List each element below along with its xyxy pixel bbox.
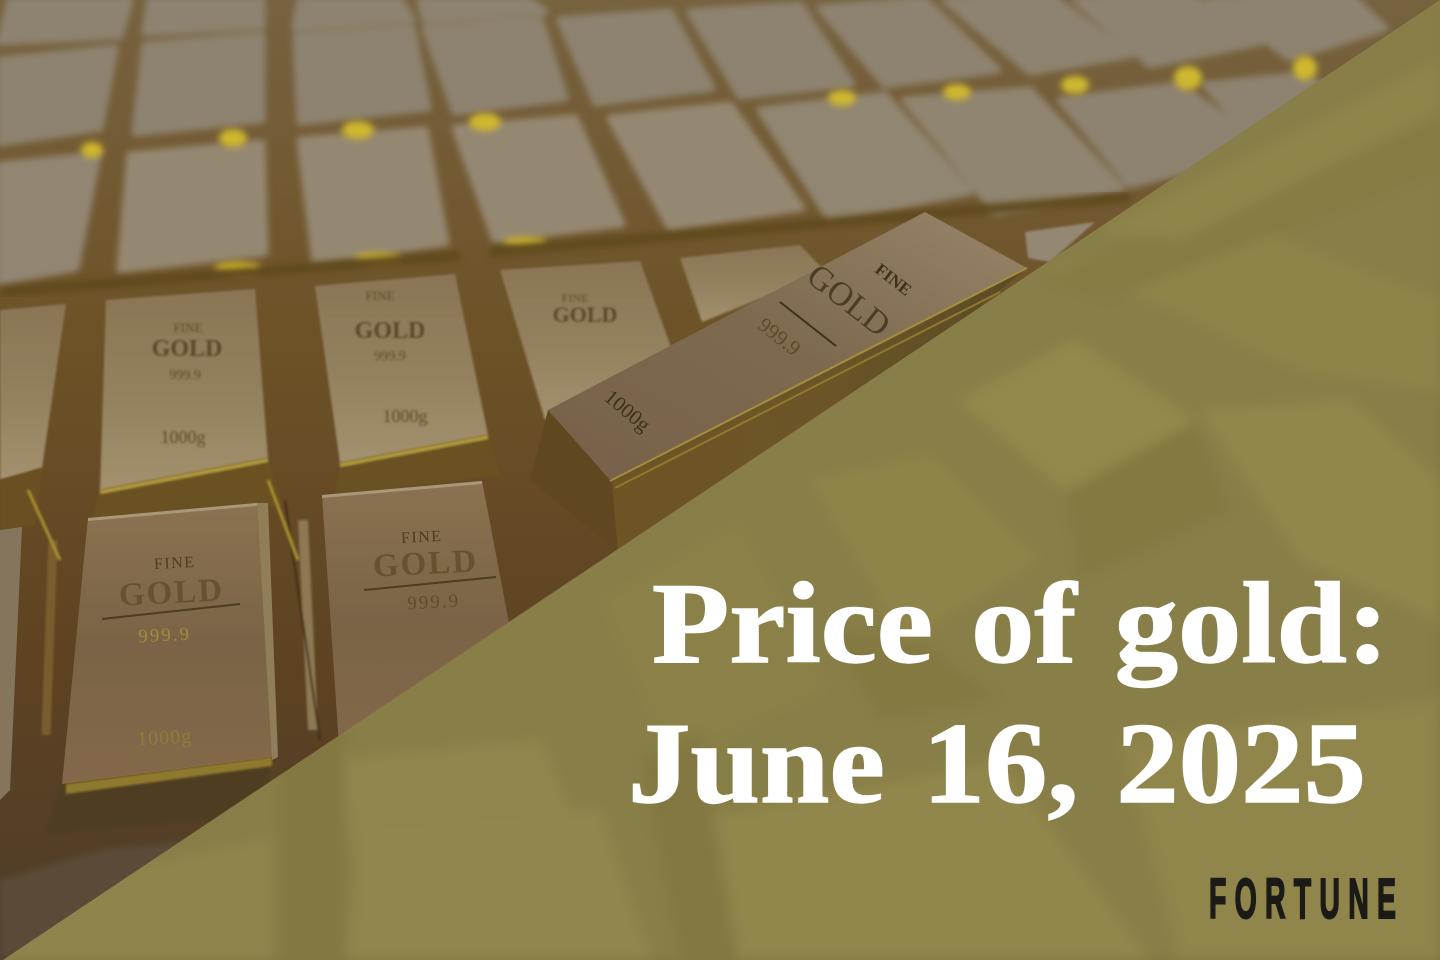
- front bar engraved labels: 999.9: [407, 591, 461, 614]
- shaded row edges: [0, 197, 1130, 292]
- middle row engraved labels: 999.9: [169, 368, 201, 383]
- middle row engraved labels: FINE: [562, 291, 588, 305]
- middle row engraved labels: 1000g: [160, 427, 206, 447]
- front bar engraved labels: FINE: [401, 528, 443, 547]
- middle row engraved labels: FINE: [174, 320, 203, 335]
- front bar engraved labels: GOLD: [118, 572, 225, 614]
- front bar engraved labels: [102, 528, 496, 750]
- featured bar engraving: FINE: [872, 260, 915, 300]
- middle row engraved labels: [152, 288, 617, 447]
- connector rods between front bars: [28, 480, 320, 740]
- front bar engraved labels: FINE: [154, 554, 196, 573]
- front bar engraved labels: 1000g: [137, 726, 193, 750]
- featured bar engraving: 999.9: [753, 312, 805, 360]
- front bar engraved labels: 999.9: [138, 624, 192, 647]
- featured bar engraving: [600, 257, 915, 437]
- title: [628, 560, 1389, 828]
- featured tilted gold bar: [530, 212, 1027, 552]
- middle row engraved labels: GOLD: [355, 318, 425, 344]
- featured bar engraving: GOLD: [800, 257, 897, 344]
- front bar engraved labels: GOLD: [372, 543, 479, 585]
- yellow highlights between back bars: [81, 56, 1317, 274]
- middle row engraved labels: 1000g: [382, 406, 428, 426]
- FORTUNE logo: FORTUNE: [1209, 866, 1396, 931]
- middle row engraved labels: GOLD: [553, 302, 617, 327]
- title line 1: Price of gold:: [652, 560, 1389, 688]
- middle row engraved labels: 999.9: [374, 349, 406, 364]
- featured bar engraving: 1000g: [600, 385, 656, 437]
- title line 2: date: June 16, 2025: [628, 700, 1366, 828]
- back rows of gold bars: [0, 0, 1385, 282]
- dark faces under the middle row: [0, 435, 500, 530]
- middle row engraved labels: GOLD: [152, 336, 222, 362]
- front row of gold bars: [0, 481, 535, 960]
- middle row engraved labels: FINE: [366, 288, 395, 303]
- middle row of gold bars: [0, 222, 1095, 490]
